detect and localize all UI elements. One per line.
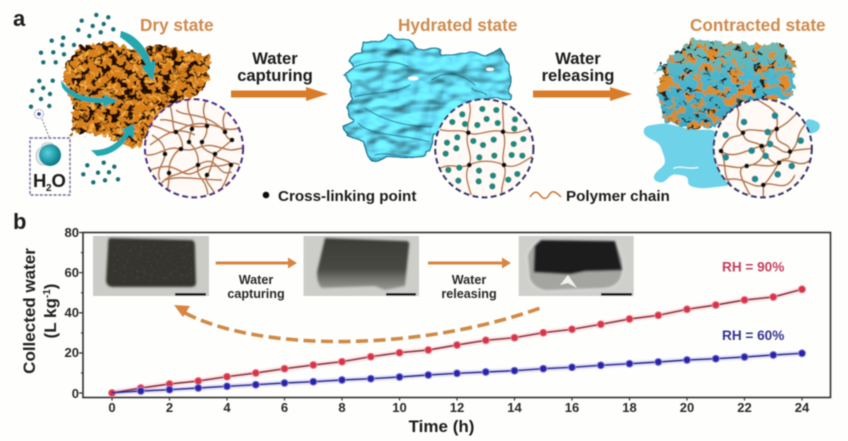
heading: hydrated state: Hydrated state: [398, 15, 517, 35]
x axis tick labels: [108, 400, 810, 415]
x axis tick labels: 14: [507, 400, 522, 415]
x axis tick labels: 2: [166, 400, 173, 415]
panel b: collected water chart: [13, 209, 830, 436]
photo: dry sample: [93, 236, 209, 296]
series label RH 90%: RH = 90%: [722, 260, 784, 274]
photo: contracted sample: [519, 236, 634, 296]
y axis ticks labels: 60: [65, 265, 79, 280]
hydrated hydrogel block: [342, 37, 512, 160]
heading: contracted state: Contracted state: [690, 15, 826, 35]
arrow: water capturing: [231, 49, 328, 101]
arrow: water releasing: releasing: [542, 66, 614, 85]
arrow: water releasing between photos: [428, 258, 511, 301]
H2O molecule box: O: [52, 170, 66, 191]
H2O molecule box: [30, 138, 70, 195]
inset: hydrated polymer network: [435, 99, 535, 197]
x axis tick labels: 8: [338, 400, 346, 415]
x axis tick labels: 22: [737, 400, 752, 415]
legend: polymer chain: Polymer chain: [566, 188, 670, 205]
icon: water molecule zoom marker: [34, 110, 49, 137]
x axis tick labels: 12: [450, 400, 464, 415]
y axis title: Collected water: [20, 248, 39, 374]
inset: dry polymer network: [145, 99, 243, 197]
RH 60% series: [112, 350, 806, 395]
y axis title: ): [41, 284, 60, 289]
RH 90% series: [108, 286, 806, 397]
panel a: hydrogel states: [13, 6, 826, 205]
y axis ticks labels: 40: [65, 305, 79, 320]
x axis tick labels: 18: [622, 400, 637, 415]
y axis title: -1: [42, 289, 53, 298]
legend: cross-linking point: Cross-linking point: [278, 188, 416, 205]
dry state hydrogel block: [62, 40, 212, 150]
x axis tick labels: 24: [795, 400, 810, 415]
x axis tick labels: 10: [392, 400, 407, 415]
y axis ticks labels: 80: [65, 225, 79, 240]
y axis title: (L kg: [41, 298, 60, 338]
arrow: water releasing: [533, 49, 632, 101]
contracted state block with released water: [643, 33, 822, 188]
arrow: water capturing between photos: capturing: [227, 287, 285, 301]
x axis tick labels: 20: [680, 400, 694, 415]
x axis tick labels: 4: [223, 400, 231, 415]
released water puddle: [643, 117, 822, 188]
H2O molecule box: 2: [46, 183, 52, 194]
water molecule dots: [29, 13, 120, 184]
arrow: water capturing: capturing: [237, 66, 313, 85]
icon: teal capture arrows: [61, 31, 156, 156]
arrow: water capturing between photos: [216, 258, 297, 301]
arrow: water releasing between photos: releasing: [441, 287, 497, 301]
y axis ticks labels: 20: [65, 345, 79, 360]
H2O molecule box: H: [33, 170, 46, 191]
arrow: water releasing: Water: [555, 49, 601, 68]
panel label a: a: [13, 6, 26, 31]
y axis ticks labels: 0: [72, 386, 79, 401]
x axis tick labels: 6: [281, 400, 288, 415]
y axis ticks labels: [65, 225, 79, 401]
chart frame and ticks: [79, 232, 830, 400]
arrow: dashed recovery curve: [174, 305, 543, 342]
x axis tick labels: 16: [565, 400, 579, 415]
x axis tick labels: 0: [108, 400, 116, 415]
arrow: water capturing between photos: Water: [239, 273, 273, 287]
x axis title: Time (h): [409, 417, 474, 436]
arrow: water releasing between photos: Water: [452, 273, 486, 287]
photo: hydrated sample: [304, 236, 419, 296]
inset: contracted polymer network: [714, 99, 815, 198]
heading: dry state: Dry state: [140, 15, 214, 35]
arrow: water capturing: Water: [252, 49, 298, 68]
panel label b: b: [13, 209, 26, 234]
y axis title: [20, 248, 60, 374]
series label RH 60%: RH = 60%: [722, 328, 784, 343]
